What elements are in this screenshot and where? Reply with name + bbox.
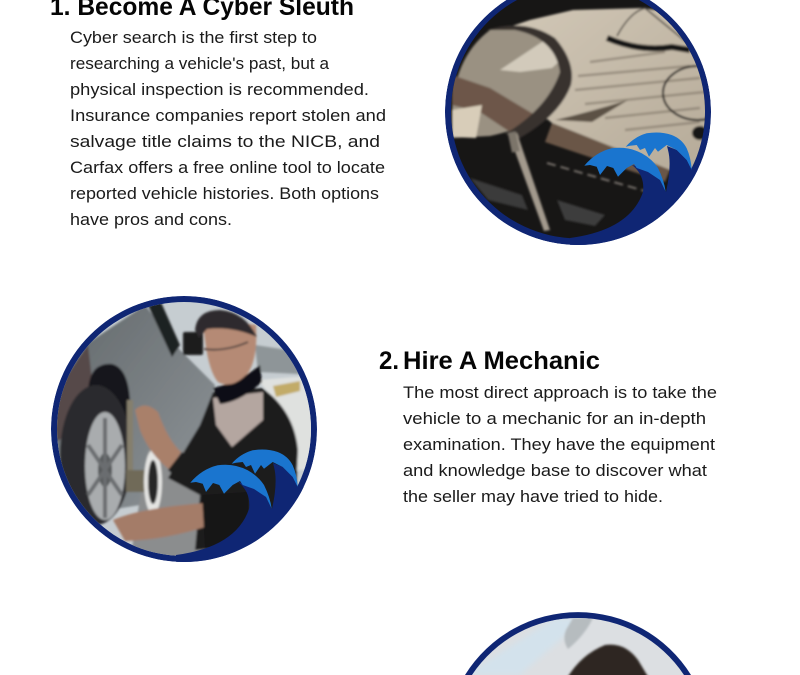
text block: step 1: reported vehicle histories. Both options — [70, 184, 379, 203]
heading: step 2: 2. — [379, 347, 399, 375]
text block: step 2: The most direct approach is to take the — [403, 383, 717, 402]
heading: step 2: Hire A Mechanic — [403, 347, 600, 375]
text block: step 1: salvage title claims to the NICB, and — [70, 132, 380, 151]
icon: waves — [570, 132, 698, 245]
image: magnifying glass on a book — [445, 0, 711, 245]
text block: step 1: researching a vehicle's past, but a — [70, 54, 330, 73]
text block: step 2: examination. They have the equipment — [403, 435, 715, 454]
text block: step 1: Cyber search is the first step to — [70, 28, 317, 47]
text block: step 1: Insurance companies report stolen and — [70, 106, 386, 125]
text block: step 1: physical inspection is recommended. — [70, 80, 369, 99]
text block: step 1: have pros and cons. — [70, 210, 232, 229]
text block: step 2 — [403, 383, 717, 506]
image: partially visible portrait — [465, 612, 691, 675]
icon: waves — [176, 450, 304, 562]
text block: step 1 — [70, 28, 386, 229]
text block: step 1: Carfax offers a free online tool to locate — [70, 158, 385, 177]
text block: step 2: vehicle to a mechanic for an in-depth — [403, 409, 706, 428]
text block: step 2: and knowledge base to discover what — [403, 461, 707, 480]
image: mechanic at a wheel — [50, 295, 326, 577]
text block: step 2: the seller may have tried to hide. — [403, 487, 663, 506]
